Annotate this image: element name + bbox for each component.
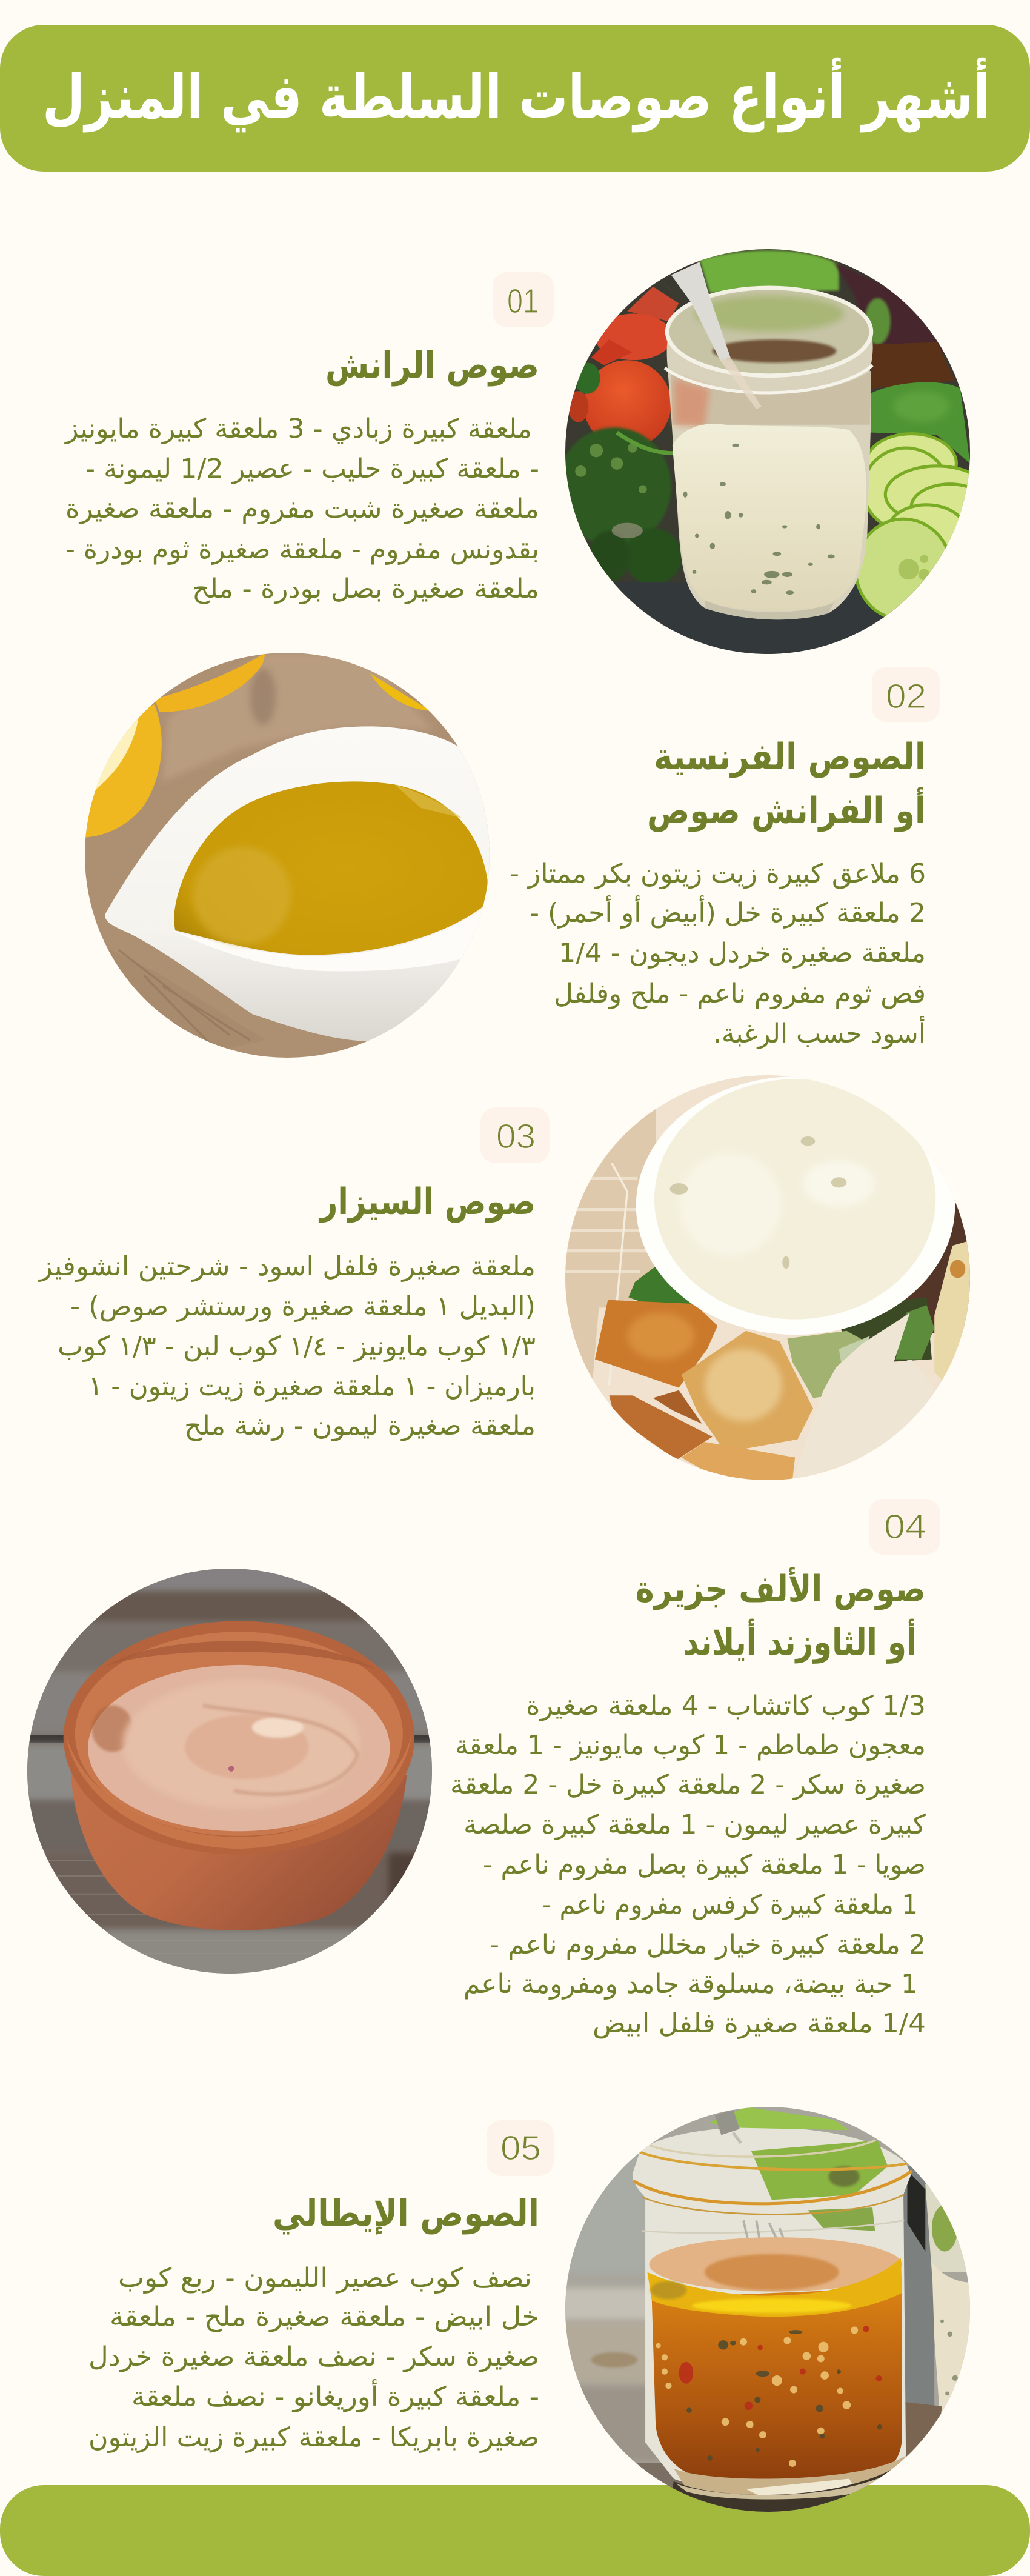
text: french ingredients: أسود حسب الرغبة. [713, 1016, 926, 1049]
heading: thousand island: صوص الألف جزيرة [636, 1567, 926, 1610]
text: caesar ingredients [38, 1251, 536, 1441]
text: ranch ingredients [64, 413, 539, 604]
text: french ingredients: ملعقة صغيرة خردل ديجون - 1/4 [559, 938, 926, 969]
text: italian ingredients: صغيرة سكر - نصف ملعقة صغيرة خردل [88, 2341, 539, 2372]
badge: 01: 01 [507, 282, 539, 321]
badge: 03 [480, 1107, 550, 1163]
whisk [715, 2109, 792, 2264]
text: thousand island ingredients: 1/3 كوب كاتشاب - 4 ملعقة صغيرة [526, 1690, 926, 1721]
heading: thousand island: أو الثاوزند أيلاند [683, 1618, 917, 1664]
heading: caesar: صوص السيزار [318, 1181, 536, 1223]
text: italian ingredients: نصف كوب عصير الليمون - ربع كوب [118, 2263, 532, 2294]
photo: french dressing bowl [85, 653, 490, 1058]
heading: ranch: صوص الرانش [325, 344, 539, 387]
panel: caesar sauce [38, 1075, 970, 1480]
text: french ingredients: 6 ملاعق كبيرة زيت زيتون بكر ممتاز - [510, 858, 926, 889]
badge: 04: 04 [884, 1507, 926, 1546]
panel: italian sauce [88, 2107, 970, 2515]
panel: french dressing [85, 653, 940, 1058]
text: italian ingredients: خل ابيض - ملعقة صغيرة ملح - ملعقة [110, 2301, 539, 2332]
right background jar [901, 2166, 934, 2412]
text: ranch ingredients: ملعقة كبيرة زبادي - 3 ملعقة كبيرة مايونيز [64, 413, 532, 444]
heading: french [647, 736, 926, 832]
jar [633, 2127, 911, 2489]
title banner [0, 25, 1030, 172]
text: thousand island ingredients: كبيرة عصير ليمون - 1 ملعقة كبيرة صلصة [463, 1809, 926, 1840]
photo: ranch dressing jar [557, 249, 989, 654]
spoon [671, 262, 731, 360]
text: italian ingredients [88, 2263, 539, 2453]
text: caesar ingredients: ١/٣ كوب مايونيز - ١/٤ كوب لبن - ١/٣ كوب [58, 1331, 536, 1362]
text: thousand island ingredients [450, 1690, 926, 2039]
badge: 05 [487, 2120, 554, 2176]
text: thousand island ingredients: 1 ملعقة كبيرة كرفس مفروم ناعم - [542, 1889, 918, 1920]
jar base [674, 2455, 906, 2498]
text: italian ingredients: صغيرة بابريكا - ملعقة كبيرة زيت الزيتون [88, 2422, 539, 2453]
vinaigrette [649, 2237, 902, 2292]
cucumber slices [856, 432, 969, 617]
heading: french: أو الفرانش صوص [647, 787, 926, 832]
heading: italian: الصوص الإيطالي [273, 2192, 539, 2235]
text: thousand island ingredients: معجون طماطم - 1 كوب مايونيز - 1 ملعقة [455, 1730, 926, 1761]
heading: french: الصوص الفرنسية [654, 736, 926, 778]
badge: 02 [872, 667, 940, 722]
photo: caesar sauce with salad [565, 1075, 970, 1480]
chicken [821, 1313, 912, 1397]
photo: italian dressing jar [553, 2107, 970, 2515]
text: ranch ingredients: ملعقة صغيرة شبت مفروم - ملعقة صغيرة [65, 493, 539, 524]
badge: 01 [493, 272, 554, 327]
text: thousand island ingredients: 1 حبة بيضة، مسلوقة جامد ومفرومة ناعم [463, 1969, 918, 2000]
text: thousand island ingredients: صغيرة سكر - 2 ملعقة كبيرة خل - 2 ملعقة [450, 1769, 926, 1800]
text: italian ingredients: - ملعقة كبيرة أوريغانو - نصف ملعقة [131, 2379, 539, 2412]
badge: 04 [869, 1499, 940, 1555]
footer banner [0, 2485, 1030, 2576]
badge: 05: 05 [500, 2129, 541, 2167]
text: caesar ingredients: بارميزان - ١ ملعقة صغيرة زيت زيتون - ١ [88, 1371, 536, 1402]
sauce cup [636, 1076, 955, 1335]
jar glass [666, 338, 873, 619]
panel: ranch sauce [64, 249, 989, 654]
badge: 03: 03 [496, 1117, 536, 1156]
text: french ingredients: فص ثوم مفروم ناعم - ملح وفلفل [554, 978, 926, 1009]
text: thousand island ingredients: 1/4 ملعقة صغيرة فلفل ابيض [593, 2008, 926, 2039]
heading: thousand island [636, 1567, 926, 1664]
text: thousand island ingredients: 2 ملعقة كبيرة خيار مخلل مفروم ناعم - [490, 1929, 926, 1960]
text: ranch ingredients: بقدونس مفروم - ملعقة صغيرة ثوم بودرة - [65, 534, 539, 565]
photo: thousand island bowl [15, 1558, 445, 1987]
croutons [595, 1300, 717, 1387]
text: caesar ingredients: ملعقة صغيرة فلفل اسود - شرحتين انشوفيز [38, 1251, 536, 1282]
panel: thousand island sauce [15, 1499, 940, 2039]
text: thousand island ingredients: صويا - 1 ملعقة كبيرة بصل مفروم ناعم - [483, 1849, 926, 1880]
text: ranch ingredients: - ملعقة كبيرة حليب - عصير 1/2 ليمونة - [85, 453, 539, 484]
sauce [673, 424, 866, 590]
text: french ingredients [510, 858, 926, 1049]
text: caesar ingredients: (البديل ١ ملعقة صغيرة ورستشر صوص) - [70, 1291, 536, 1322]
text: caesar ingredients: ملعقة صغيرة ليمون - رشة ملح [184, 1410, 536, 1441]
text: ranch ingredients: ملعقة صغيرة بصل بودرة - ملح [192, 573, 539, 604]
text: french ingredients: 2 ملعقة كبيرة خل (أبيض أو أحمر) - [530, 895, 926, 929]
badge: 02: 02 [886, 677, 926, 716]
